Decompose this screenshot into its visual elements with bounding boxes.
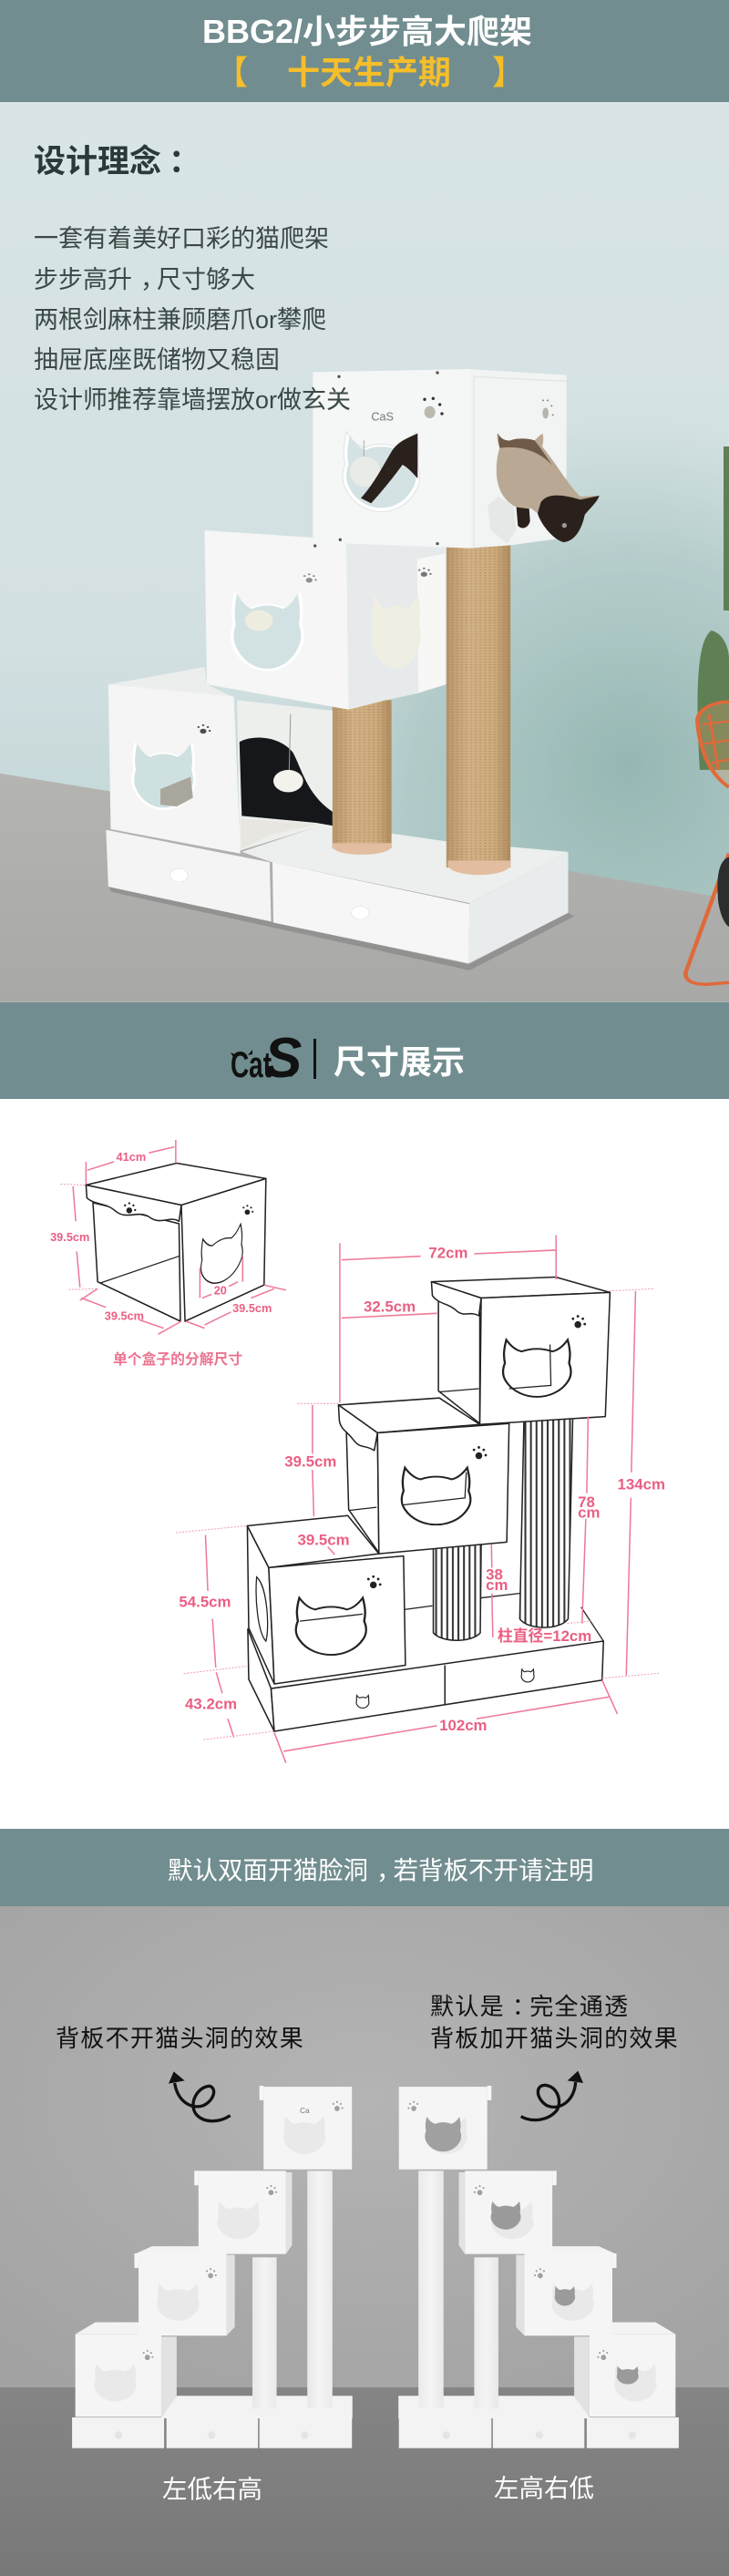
section heading: 尺寸展示 — [334, 1043, 465, 1081]
arrow: left swirl — [169, 2071, 231, 2121]
concept lines — [34, 225, 351, 414]
low box front — [108, 684, 241, 854]
single box labels: 20 — [214, 1283, 227, 1297]
low box cat hole — [131, 742, 196, 810]
header background — [0, 0, 729, 102]
caption: left tower: 左低右高 — [162, 2475, 262, 2503]
panel: two orientation renders — [0, 1906, 729, 2576]
box 1 — [574, 2322, 675, 2417]
middle box pom-pom — [245, 611, 272, 631]
middle box cat hole — [231, 591, 304, 672]
top box front — [313, 369, 469, 549]
floor — [0, 774, 729, 1002]
heading: 设计理念： — [34, 144, 200, 180]
logo on box: CaS — [371, 411, 394, 424]
back frame lines — [405, 1593, 520, 1609]
left tower: low left, high right — [72, 2086, 353, 2448]
paw side — [542, 399, 554, 418]
top box and cat — [313, 369, 600, 549]
cactus — [697, 631, 729, 770]
cat head — [538, 496, 600, 542]
right tower: high left, low right — [398, 2086, 679, 2448]
icon: CatS logo: S — [264, 1027, 302, 1090]
plant strip at right edge — [724, 446, 729, 611]
drawers — [399, 2417, 679, 2448]
base side — [468, 852, 568, 963]
note text: 默认双面开猫脸洞 ，若背板不开请注明 — [168, 1856, 594, 1884]
drawer shadow — [108, 887, 574, 970]
cat back shading — [498, 433, 553, 467]
main dimension labels: 柱直径=12cm — [498, 1627, 591, 1645]
divider — [313, 1039, 316, 1079]
single box labels: 39.5cm — [232, 1301, 272, 1315]
wall — [0, 1906, 729, 2387]
post tall — [307, 2171, 333, 2407]
low box interior — [237, 700, 333, 851]
icon: CatS logo — [231, 1027, 302, 1090]
cat front leg — [517, 508, 530, 528]
single box labels: 39.5cm — [105, 1309, 144, 1322]
main dimension labels: 43.2cm — [185, 1696, 237, 1713]
top box side — [469, 369, 567, 549]
wall — [0, 102, 729, 1004]
white background — [0, 1099, 729, 1829]
main dimension labels: cm — [578, 1504, 601, 1521]
band background — [0, 1829, 729, 1906]
box 2 — [134, 2246, 235, 2335]
hanging pom-pom — [350, 440, 380, 487]
main dimension labels: 134cm — [618, 1476, 665, 1493]
base plate — [160, 2396, 353, 2418]
panel: note band — [0, 1829, 729, 1906]
diagram coordinates — [50, 1140, 665, 1763]
single box labels: 39.5cm — [50, 1230, 89, 1244]
left drawer — [106, 830, 271, 921]
caption: single box size: 单个盒子的分解尺寸 — [113, 1350, 242, 1368]
main dimension labels: 54.5cm — [179, 1593, 231, 1610]
concept lines: 步步高升 ，尺寸够大 — [34, 266, 255, 293]
panel: title header band — [0, 0, 729, 102]
middle box drawing — [338, 1398, 509, 1554]
base plate — [398, 2396, 590, 2418]
panel: product photo — [0, 102, 729, 1004]
drawer knob right — [352, 907, 369, 919]
annotation: back panel closed: 背板不开猫头洞的效果 — [56, 2025, 304, 2052]
annotation: default open: 背板加开猫头洞的效果 — [430, 2025, 679, 2052]
arrow: right swirl — [521, 2071, 583, 2120]
side panel paw — [418, 568, 432, 577]
concept lines: 抽屉底座既储物又稳固 — [34, 346, 280, 374]
pom-pom toy — [273, 770, 303, 792]
low box top — [108, 667, 232, 697]
annotation: default open: 默认是 ：完全通透 — [430, 1993, 629, 2020]
title: BBG2/小步步高大爬架 — [202, 13, 532, 50]
side panel inner edge — [474, 376, 567, 549]
siamese cat body — [497, 433, 600, 542]
subtitle: production period: 十天生产期 — [287, 54, 451, 91]
drawers — [72, 2417, 352, 2448]
main dimension labels: 38 — [486, 1566, 503, 1584]
paw front — [423, 397, 444, 418]
panel: dimension diagrams — [0, 1099, 729, 1829]
box 4 — [260, 2086, 352, 2170]
concept lines: 两根剑麻柱兼顾磨爪or攀爬 — [34, 306, 326, 334]
cat eye — [562, 523, 567, 528]
subtitle: production period: 】 — [492, 54, 525, 91]
orange basket chair — [685, 702, 729, 984]
subtitle: production period: 【 — [215, 54, 248, 91]
subtitle: production period — [215, 54, 525, 91]
screws — [313, 371, 439, 548]
inner floor plate — [241, 818, 318, 849]
main dimension labels: 32.5cm — [364, 1298, 416, 1315]
post short — [252, 2257, 277, 2408]
box 3 — [459, 2171, 557, 2254]
main dimension labels: 78 — [578, 1493, 595, 1511]
caption: right tower: 左高右低 — [494, 2474, 594, 2502]
drawer knob left — [170, 868, 188, 882]
box 1 — [76, 2322, 177, 2417]
middle box side — [346, 539, 447, 710]
low box paw — [198, 724, 210, 734]
panel: design concept text — [34, 144, 351, 414]
floor and lower furniture — [0, 530, 729, 1002]
top box drawing — [431, 1278, 610, 1424]
top box cat hole — [343, 431, 420, 512]
tall post drawing — [519, 1417, 573, 1627]
single box drawing — [86, 1164, 266, 1321]
middle box white side panel — [417, 554, 445, 693]
annotation: default open — [430, 1993, 679, 2052]
main dimension labels: cm — [486, 1576, 508, 1594]
icon: CatS logo: Cat — [231, 1045, 272, 1085]
single box labels — [50, 1150, 272, 1322]
single box labels: 41cm — [117, 1150, 146, 1164]
floor — [0, 2387, 729, 2576]
low box drawing — [247, 1515, 406, 1684]
single box dimensions — [60, 1140, 286, 1334]
render coordinates — [72, 2086, 679, 2448]
post short — [474, 2257, 498, 2408]
middle box paw — [303, 573, 317, 582]
base drawing — [248, 1607, 603, 1731]
middle box cream cat hole — [372, 593, 421, 669]
main dimension labels: 102cm — [439, 1717, 488, 1734]
main dimension labels — [179, 1245, 665, 1734]
short sisal post — [333, 700, 392, 855]
shadow under cat — [488, 497, 517, 544]
box 4 — [399, 2086, 491, 2170]
main dimension lines — [176, 1236, 659, 1763]
post tall — [418, 2171, 444, 2407]
base top — [241, 824, 568, 903]
box 3 — [194, 2171, 292, 2254]
black cat inside box — [240, 738, 333, 826]
middle box front — [204, 530, 349, 710]
box 2 — [516, 2246, 617, 2335]
main dimension labels: 72cm — [428, 1245, 467, 1262]
band background — [0, 1002, 729, 1099]
concept lines: 设计师推荐靠墙摆放or做玄关 — [34, 386, 351, 414]
short post drawing — [434, 1545, 481, 1640]
box 4: Ca — [300, 2106, 310, 2115]
panel: size section band — [0, 1002, 729, 1099]
main dimension labels: 39.5cm — [284, 1453, 336, 1471]
right drawer — [272, 862, 469, 963]
main dimension labels: 39.5cm — [298, 1531, 350, 1548]
plant pot — [717, 857, 729, 927]
concept lines: 一套有着美好口彩的猫爬架 — [34, 225, 329, 252]
tall sisal post — [447, 543, 510, 875]
hanging toy string — [289, 714, 291, 770]
cat tail in hole — [361, 434, 417, 503]
